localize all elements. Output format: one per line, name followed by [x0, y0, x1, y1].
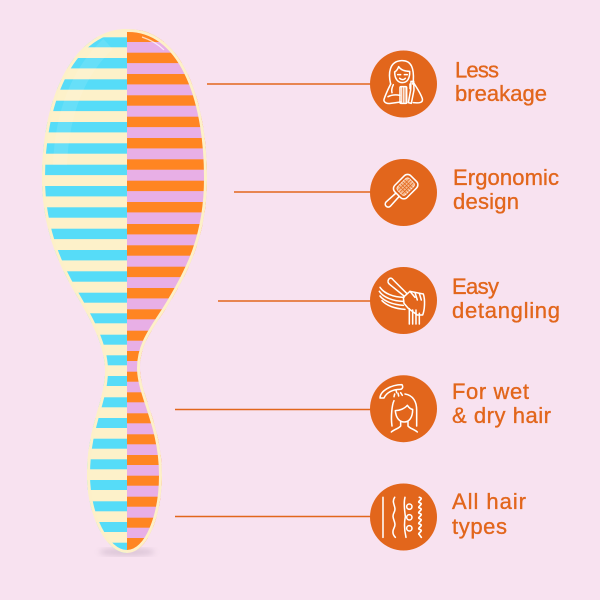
label: for wet: For wet: [452, 379, 529, 404]
label: breakage: breakage: [455, 81, 547, 106]
feature: easy detangling: [370, 267, 560, 334]
brush shadow: [99, 548, 155, 556]
icon: shower and head: [370, 375, 437, 442]
feature: for wet and dry hair: [370, 375, 551, 442]
hair brush illustration: [42, 29, 207, 553]
label: types: types: [452, 514, 507, 539]
label: design: design: [453, 189, 519, 214]
label: ergonomic: Ergonomic: [453, 165, 559, 190]
feature: all hair types: [370, 484, 526, 550]
icon: woman brushing hair: [370, 50, 437, 118]
feature: less breakage: [370, 50, 547, 118]
label: less: Less: [455, 58, 499, 82]
label: easy: Easy: [452, 274, 499, 299]
connector lines: [175, 84, 377, 516]
label: and dry hair: & dry hair: [452, 403, 551, 428]
icon: hand detangling hair: [370, 267, 437, 334]
icon: hair types: [370, 484, 437, 550]
label: all hair: All hair: [452, 489, 526, 514]
label: detangling: detangling: [452, 298, 560, 323]
icon: paddle brush: [370, 159, 437, 226]
feature: ergonomic design: [370, 159, 559, 226]
